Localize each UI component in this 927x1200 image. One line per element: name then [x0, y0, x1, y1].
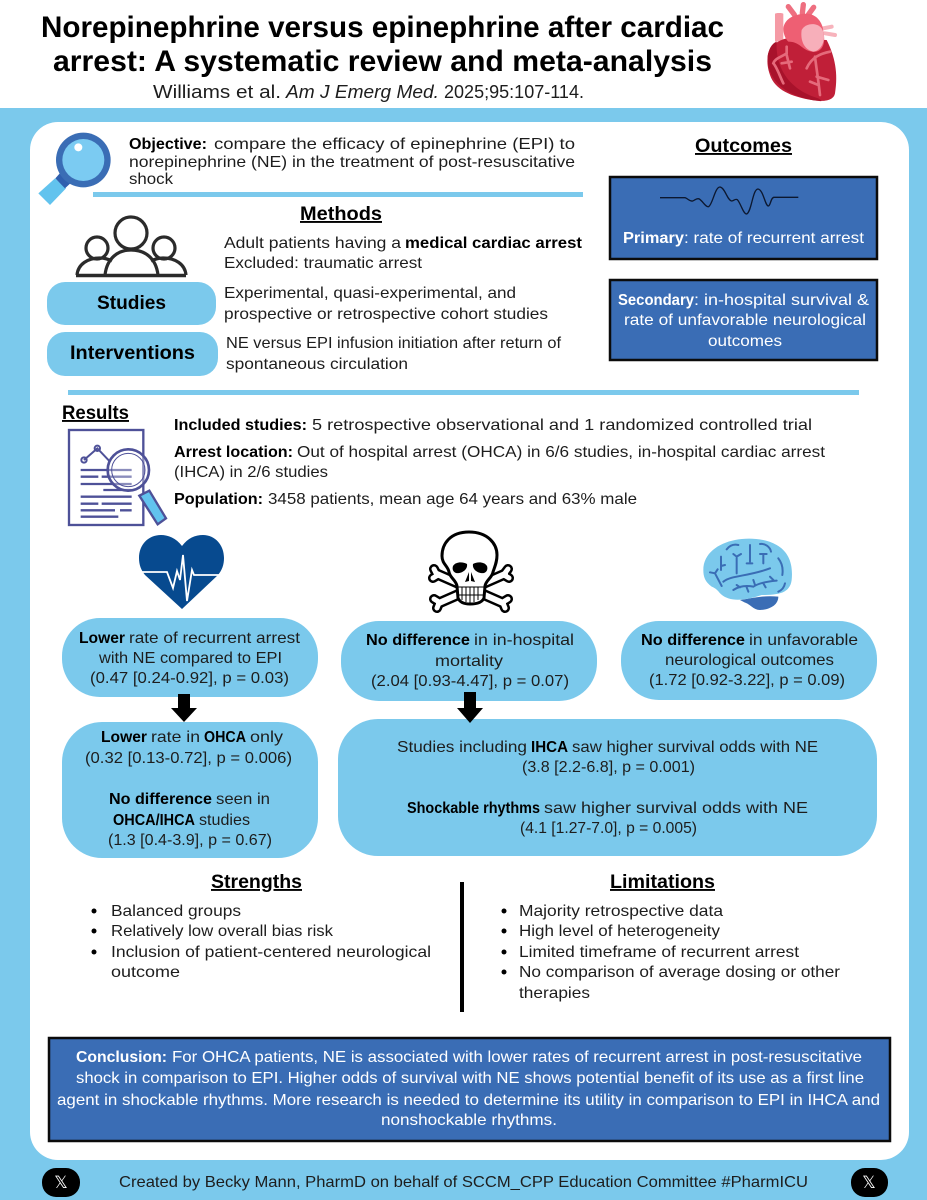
bubble: survival subgroups: saw higher survival odds with NE	[544, 800, 808, 817]
methods population text: Excluded: traumatic arrest	[224, 255, 423, 272]
objective text: Objective:	[129, 136, 207, 153]
methods population text: medical cardiac arrest	[405, 235, 582, 252]
strengths list: outcome	[111, 964, 180, 981]
bubble: neurological outcomes: (1.72 [0.92-3.22], p = 0.09)	[649, 672, 845, 689]
panel: conclusion: nonshockable rhythms.	[381, 1112, 557, 1129]
bubble: neurological outcomes: in unfavorable	[749, 632, 858, 649]
citation	[153, 82, 584, 102]
bubble: in-hospital mortality	[341, 621, 597, 701]
bubble: recurrent arrest subgroups: (0.32 [0.13-0.72], p = 0.006)	[85, 750, 292, 767]
methods population text: Adult patients having a	[224, 235, 401, 252]
bubble: recurrent arrest: with NE compared to EPI	[98, 650, 282, 667]
bubble: recurrent arrest subgroups: Lower	[101, 729, 147, 746]
heading: limitations: Limitations	[610, 872, 715, 893]
limitations list: High level of heterogeneity	[519, 923, 720, 940]
limitations list	[502, 903, 841, 1002]
bubble: recurrent arrest	[62, 618, 318, 697]
icon: skull and crossbones	[433, 532, 509, 608]
bubble: recurrent arrest: Lower	[79, 630, 125, 647]
icon: X logo right	[851, 1168, 888, 1197]
title: arrest: A systematic review and meta-analysis	[53, 45, 712, 78]
heading: results: Results	[62, 403, 129, 424]
citation: Am J Emerg Med.	[285, 82, 439, 102]
methods population text	[224, 235, 582, 272]
bubble: survival subgroups: (3.8 [2.2-6.8], p = 0.001)	[522, 759, 695, 776]
heading: strengths: Strengths	[211, 872, 302, 893]
citation: 2025;95:107-114.	[444, 82, 584, 102]
bubble: survival subgroups	[338, 719, 877, 856]
results summary text	[174, 417, 826, 508]
bubble: survival subgroups: Shockable rhythms	[407, 800, 540, 817]
footer credit: Created by Becky Mann, PharmD on behalf of SCCM_CPP Education Committee #PharmICU	[119, 1174, 808, 1191]
header band	[0, 0, 927, 108]
panel: conclusion: shock in comparison to EPI. Higher odds of survival with NE shows potential benefit of its use as a first line	[76, 1070, 864, 1087]
bubble: neurological outcomes	[621, 621, 877, 700]
bubble: recurrent arrest subgroups: only	[250, 729, 283, 746]
strengths list: Balanced groups	[111, 903, 241, 920]
icon: report with magnifier	[69, 430, 166, 525]
panel: secondary outcome: : in-hospital survival &	[694, 292, 869, 309]
pill: studies: Studies	[97, 293, 166, 314]
pill: interventions	[47, 332, 218, 376]
icon: magnifying glass	[38, 133, 111, 205]
bubble: recurrent arrest subgroups: OHCA	[204, 729, 246, 746]
bubble: in-hospital mortality: No difference	[366, 632, 470, 649]
icon: people group	[76, 217, 186, 276]
heading: outcomes: Outcomes	[695, 136, 792, 157]
pill: interventions: Interventions	[70, 343, 195, 364]
bubble: in-hospital mortality: (2.04 [0.93-4.47], p = 0.07)	[371, 673, 569, 690]
icon: X logo right: 𝕏	[862, 1173, 876, 1192]
panel: conclusion: agent in shockable rhythms. More research is needed to determine its utility in comparison to EPI in IHCA and	[57, 1092, 880, 1109]
studies text	[224, 285, 548, 323]
bubble: recurrent arrest subgroups	[62, 722, 318, 858]
panel: conclusion: Conclusion:	[76, 1049, 167, 1066]
bubble: recurrent arrest: rate of recurrent arrest	[129, 630, 301, 647]
panel: primary outcome	[610, 177, 877, 259]
bubble: in-hospital mortality: in in-hospital	[474, 632, 574, 649]
icon: brain	[703, 539, 792, 610]
panel: secondary outcome: rate of unfavorable neurological	[624, 312, 866, 329]
results summary text: (IHCA) in 2/6 studies	[174, 464, 328, 481]
results summary text: 3458 patients, mean age 64 years and 63% male	[268, 491, 637, 508]
limitations list: therapies	[519, 985, 590, 1002]
icon: X logo left	[42, 1168, 80, 1197]
bubble: recurrent arrest: (0.47 [0.24-0.92], p = 0.03)	[90, 670, 289, 687]
arrow: mortality to subgroups	[457, 692, 483, 723]
title: Norepinephrine versus epinephrine after cardiac	[41, 11, 724, 44]
icon: X logo left: 𝕏	[54, 1173, 68, 1192]
studies text: prospective or retrospective cohort studies	[224, 306, 548, 323]
citation: Williams et al.	[153, 82, 281, 102]
interventions text	[226, 335, 562, 373]
bubble: recurrent arrest subgroups: seen in	[216, 791, 270, 808]
bubble: recurrent arrest subgroups: rate in	[151, 729, 200, 746]
panel: conclusion	[49, 1038, 890, 1141]
objective text: norepinephrine (NE) in the treatment of post-resuscitative	[129, 154, 575, 171]
panel: conclusion: For OHCA patients, NE is associated with lower rates of recurrent arrest in post-resuscitative	[172, 1049, 862, 1066]
bubble: in-hospital mortality: mortality	[435, 653, 503, 670]
panel: secondary outcome: Secondary	[618, 292, 694, 309]
objective text	[129, 136, 575, 188]
heading: methods: Methods	[300, 204, 382, 225]
bubble: recurrent arrest subgroups: OHCA/IHCA	[113, 812, 195, 829]
arrow: recurrent arrest to subgroups	[171, 694, 197, 722]
bubble: survival subgroups: Studies including	[397, 739, 527, 756]
strengths list	[92, 903, 431, 981]
results summary text: Out of hospital arrest (OHCA) in 6/6 studies, in-hospital cardiac arrest	[297, 444, 826, 461]
objective text: shock	[129, 171, 174, 188]
icon: anatomical heart	[767, 5, 836, 101]
bubble: survival subgroups: IHCA	[531, 739, 568, 756]
bubble: recurrent arrest subgroups: studies	[199, 812, 250, 829]
objective text: compare the efficacy of epinephrine (EPI) to	[214, 136, 575, 153]
results summary text: 5 retrospective observational and 1 randomized controlled trial	[312, 417, 812, 434]
title	[41, 11, 724, 78]
bubble: survival subgroups: (4.1 [1.27-7.0], p = 0.005)	[520, 820, 697, 837]
panel: primary outcome: : rate of recurrent arrest	[684, 230, 865, 247]
limitations list: No comparison of average dosing or other	[519, 964, 841, 981]
icon: ecg trace	[660, 187, 798, 214]
strengths list: Inclusion of patient-centered neurological	[111, 944, 431, 961]
panel: secondary outcome	[610, 280, 877, 360]
bubble: recurrent arrest subgroups: (1.3 [0.4-3.9], p = 0.67)	[108, 832, 272, 849]
bubble: recurrent arrest subgroups: No difference	[109, 791, 212, 808]
results summary text: Arrest location:	[174, 444, 293, 461]
interventions text: spontaneous circulation	[226, 356, 408, 373]
limitations list: Majority retrospective data	[519, 903, 723, 920]
bubble: neurological outcomes: neurological outcomes	[665, 652, 834, 669]
limitations list: Limited timeframe of recurrent arrest	[519, 944, 800, 961]
strengths list: Relatively low overall bias risk	[111, 923, 334, 940]
icon: heart with ecg	[139, 535, 224, 609]
panel: secondary outcome: outcomes	[708, 333, 782, 350]
results summary text: Included studies:	[174, 417, 307, 434]
panel: primary outcome: Primary	[623, 230, 684, 247]
bubble: survival subgroups: saw higher survival odds with NE	[572, 739, 818, 756]
studies text: Experimental, quasi-experimental, and	[224, 285, 516, 302]
results summary text: Population:	[174, 491, 263, 508]
interventions text: NE versus EPI infusion initiation after return of	[226, 335, 562, 352]
pill: studies	[47, 282, 216, 325]
bubble: neurological outcomes: No difference	[641, 632, 745, 649]
